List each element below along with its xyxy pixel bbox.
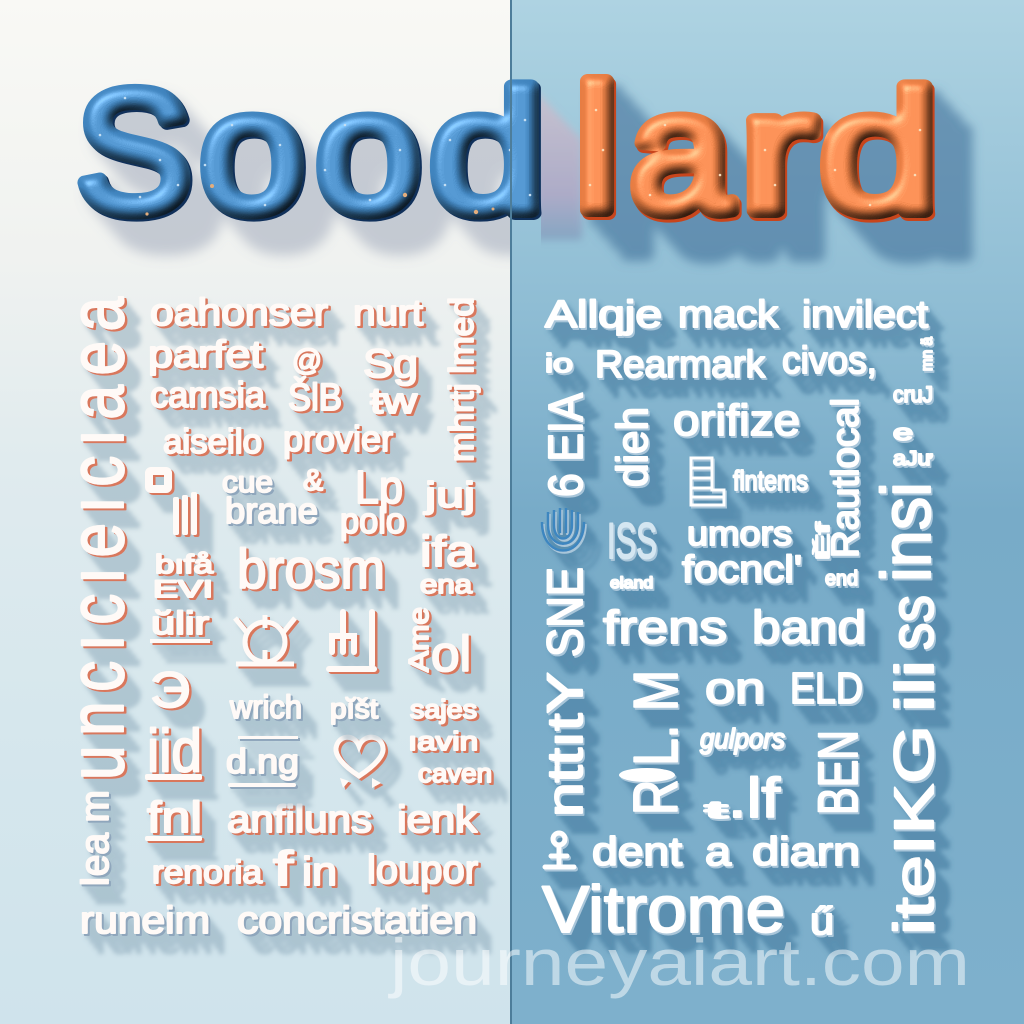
glyph: EVI <box>153 576 213 603</box>
word: loupor <box>367 848 478 892</box>
word: camsia <box>150 374 266 415</box>
glyph with underline <box>150 605 210 643</box>
vertical word small: Iea m <box>73 790 117 887</box>
watermark: journeyaiart.com <box>388 925 970 999</box>
word: in <box>302 850 337 894</box>
word: wrich <box>229 689 302 725</box>
right panel background <box>511 0 1024 1024</box>
title word: Sood: o <box>316 56 420 248</box>
word: f <box>273 843 294 896</box>
word: band <box>752 601 866 653</box>
word: parfet <box>148 334 264 376</box>
title shadow: Sood: S <box>77 56 191 248</box>
word with underline: fnl <box>147 793 202 842</box>
vertical glyph: mn ä <box>919 337 936 371</box>
title word: Sood: d <box>430 56 544 248</box>
word: pĭšt <box>330 693 378 724</box>
mauve shadow cast across the divider <box>535 90 582 240</box>
glyph: ol <box>431 626 471 682</box>
salmon-edged words <box>52 292 492 896</box>
title word: lard: d <box>822 60 940 251</box>
word: ena <box>420 569 473 599</box>
vertical word: ili <box>885 660 945 712</box>
word: ELD <box>790 664 863 713</box>
glyph: ŠlB <box>288 375 342 419</box>
title shadow: lard: r <box>740 56 816 248</box>
glyph: Э <box>150 662 190 718</box>
title word: lard: d <box>820 57 938 248</box>
word: runeim <box>80 900 210 942</box>
vertical glyph: Ěf <box>813 521 833 560</box>
word: provier <box>283 418 393 459</box>
icon: blue concentric arcs <box>542 508 584 550</box>
title word: lard: r <box>742 59 818 251</box>
word: diarn <box>752 830 860 874</box>
glyph with underline: ŭlir <box>151 605 209 641</box>
word with rails <box>226 736 299 787</box>
word: dent <box>592 830 682 874</box>
word: civos, <box>782 340 877 382</box>
panel: right word cloud <box>537 294 947 946</box>
word: Lp <box>355 461 403 513</box>
title word: lard: l <box>576 52 622 251</box>
title word: Sood: d <box>432 58 546 250</box>
glyph: juj <box>424 474 475 515</box>
title word: Sood: S <box>79 58 193 250</box>
word: ifa <box>420 527 476 576</box>
word: caven <box>418 758 492 788</box>
icon: list lines <box>691 458 724 505</box>
icon: heart <box>336 737 383 788</box>
word: flntems <box>733 465 808 496</box>
word with rails: d.ng <box>226 743 299 781</box>
glitter specks: lard <box>589 109 921 206</box>
title word: Sood: S <box>77 56 191 248</box>
title: Soodlard <box>77 49 940 251</box>
vertical word: nttıtY <box>537 672 593 817</box>
glyph: e <box>893 420 913 445</box>
word: brane <box>225 490 318 531</box>
glitter specks: Sood <box>99 97 531 206</box>
word: mack <box>678 294 779 336</box>
icon: blob inside vertical word <box>619 768 675 782</box>
word: brosm <box>237 537 385 600</box>
word: frens <box>603 601 727 653</box>
word: focncl' <box>682 549 802 591</box>
glyph: ISS <box>607 513 657 569</box>
word: Vitrome <box>542 872 785 946</box>
vertical word: SNE <box>537 567 593 657</box>
glyph: ŧ <box>705 797 728 824</box>
vertical word: 6 EIA <box>540 393 593 497</box>
title shadow: Sood <box>82 92 510 260</box>
vertical word: uncıcıeıcıaea <box>52 296 140 780</box>
grey-edged words <box>73 466 477 942</box>
icon: bars <box>173 492 197 535</box>
word: anfiluns <box>227 799 372 841</box>
title word: lard: l <box>574 49 620 248</box>
word: oahonser <box>150 292 328 334</box>
title shadow: Sood: d <box>430 56 544 248</box>
title shadow: Sood: o <box>200 56 304 248</box>
icon: circular arrows <box>235 615 295 664</box>
word: cue <box>222 466 273 499</box>
glyph: bıfå <box>155 549 214 579</box>
glyph: ŧw <box>370 380 418 421</box>
vertical glyph: Ame <box>403 607 434 672</box>
title shadow: Sood: o <box>316 56 420 248</box>
title word: Sood: o <box>318 58 422 250</box>
word: a <box>705 830 732 874</box>
word: aiseilo <box>163 423 262 461</box>
word: concristatien <box>237 900 477 942</box>
title word: lard: r <box>740 56 816 248</box>
word: nurt <box>353 292 423 333</box>
word: ıavin <box>408 726 478 756</box>
word: renoria <box>152 854 262 890</box>
title shadow: lard: a <box>630 56 733 248</box>
icon: small square <box>149 471 168 489</box>
vertical word: ss <box>878 595 947 650</box>
glyph: @ <box>292 344 322 377</box>
ampersand: & <box>303 464 323 497</box>
word: end <box>825 568 858 590</box>
vertical word: insi <box>867 482 945 582</box>
vertical word: BEN <box>806 730 869 815</box>
word: sajes <box>410 694 477 724</box>
glyph: Sg <box>363 342 418 386</box>
word with underline: iid <box>147 717 202 784</box>
panel: left word cloud <box>52 292 492 942</box>
word: gulpors <box>700 723 785 754</box>
word: ienk <box>397 799 478 841</box>
glyph: ű <box>810 901 834 943</box>
vertical word: mhrtj lmed <box>443 297 481 462</box>
word: on <box>705 664 765 713</box>
word: orifize <box>673 396 800 445</box>
left panel background <box>0 0 511 1024</box>
vertical word: iteIKG <box>882 725 945 935</box>
title shadow: lard <box>574 49 938 248</box>
vertical word: dieh <box>608 407 657 487</box>
title word: Sood: o <box>202 58 306 250</box>
title shadow: lard: d <box>820 57 938 248</box>
word: umors <box>687 515 792 553</box>
word: io <box>545 348 573 378</box>
word: polo <box>340 500 405 541</box>
word: Rearmark <box>595 344 766 386</box>
title word: lard <box>574 49 940 251</box>
title word: lard: a <box>632 59 735 251</box>
word: cruJ <box>893 382 933 407</box>
center divider <box>510 0 512 1024</box>
title word: lard: a <box>630 56 733 248</box>
icon: small stemmed circle <box>545 833 574 867</box>
title shadow: lard: l <box>574 49 620 248</box>
word: Allqje <box>545 294 662 336</box>
word: .lf <box>728 766 781 829</box>
glyph: aJư <box>893 448 933 470</box>
vertical word: R L. M <box>622 670 691 815</box>
title word: Sood <box>77 56 546 250</box>
glyph: eland <box>610 575 653 592</box>
icon: chart glyph <box>329 612 374 669</box>
vertical word: Rautlocal <box>825 398 867 558</box>
word: invilect <box>802 294 928 336</box>
title word: Sood: o <box>200 56 304 248</box>
